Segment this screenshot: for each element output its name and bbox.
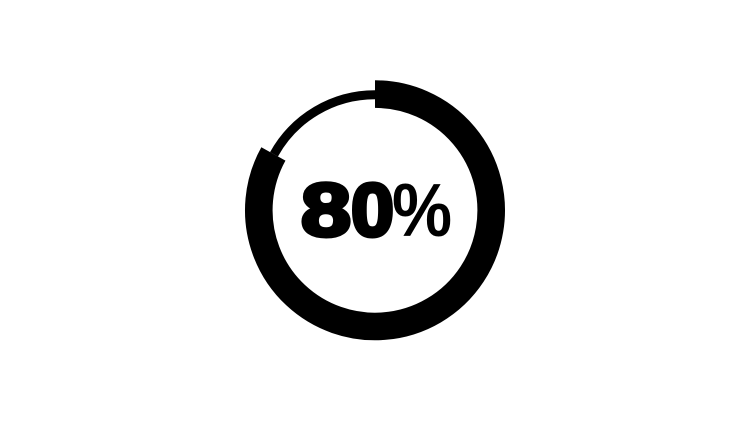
donut chart: thick 80 percent arc xyxy=(259,94,491,326)
value label: 80%: % xyxy=(392,168,452,252)
donut chart: thin remaining arc xyxy=(274,95,375,154)
value label: 80% xyxy=(301,168,452,252)
value label: 80%: 8 xyxy=(301,168,351,252)
value label: 80%: 0 xyxy=(351,168,394,252)
